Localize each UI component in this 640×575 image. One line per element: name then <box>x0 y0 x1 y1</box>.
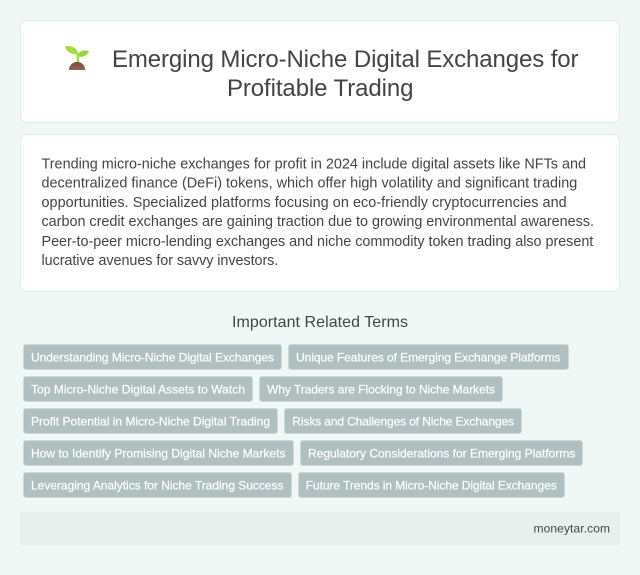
panel: summary text card: Trending micro-niche exchanges for profit in 2024 include digital assets like NFTs and <box>42 156 586 172</box>
panel: summary text card: Peer-to-peer micro-lending exchanges and niche commodity token trading also present <box>42 234 593 250</box>
footer <box>20 512 620 545</box>
tag list: related terms <box>24 344 582 498</box>
heading: important related terms: Important Related Terms <box>232 314 408 331</box>
tag: Profit Potential in Micro-Niche Digital Trading <box>31 414 270 428</box>
tag: Leveraging Analytics for Niche Trading Success <box>31 478 284 492</box>
tag <box>24 408 278 434</box>
panel: title card <box>20 20 620 122</box>
tag <box>298 472 564 498</box>
tag: Future Trends in Micro-Niche Digital Exchanges <box>306 478 557 492</box>
tag <box>284 408 522 434</box>
tag <box>24 472 292 498</box>
tag: Unique Features of Emerging Exchange Platforms <box>296 350 560 364</box>
tag <box>24 376 252 402</box>
panel: summary text card <box>20 134 620 292</box>
tag <box>288 344 568 370</box>
tag: Why Traders are Flocking to Niche Markets <box>267 382 495 396</box>
panel: summary text card: carbon credit exchanges are gaining traction due to growing environmental awareness. <box>42 214 594 230</box>
title line 1: Emerging Micro-Niche Digital Exchanges for <box>112 46 578 73</box>
tag: Regulatory Considerations for Emerging Platforms <box>308 446 575 460</box>
icon: seedling <box>65 46 89 70</box>
tag <box>300 440 582 466</box>
tag <box>260 376 502 402</box>
tag: Understanding Micro-Niche Digital Exchanges <box>31 350 274 364</box>
title line 2: Profitable Trading <box>227 75 414 102</box>
tag: Top Micro-Niche Digital Assets to Watch <box>31 382 245 396</box>
panel: summary text card: lucrative avenues for savvy investors. <box>42 253 278 269</box>
panel: summary text card: opportunities. Specialized platforms focusing on eco-friendly cryptocurrencies and <box>42 195 567 211</box>
tag: How to Identify Promising Digital Niche Markets <box>31 446 286 460</box>
panel: summary text card: decentralized finance (DeFi) tokens, which offer high volatility and significant trading <box>42 176 577 192</box>
tag <box>24 344 282 370</box>
tag: Risks and Challenges of Niche Exchanges <box>292 414 514 428</box>
tag <box>24 440 294 466</box>
footer: moneytar.com <box>534 522 610 536</box>
